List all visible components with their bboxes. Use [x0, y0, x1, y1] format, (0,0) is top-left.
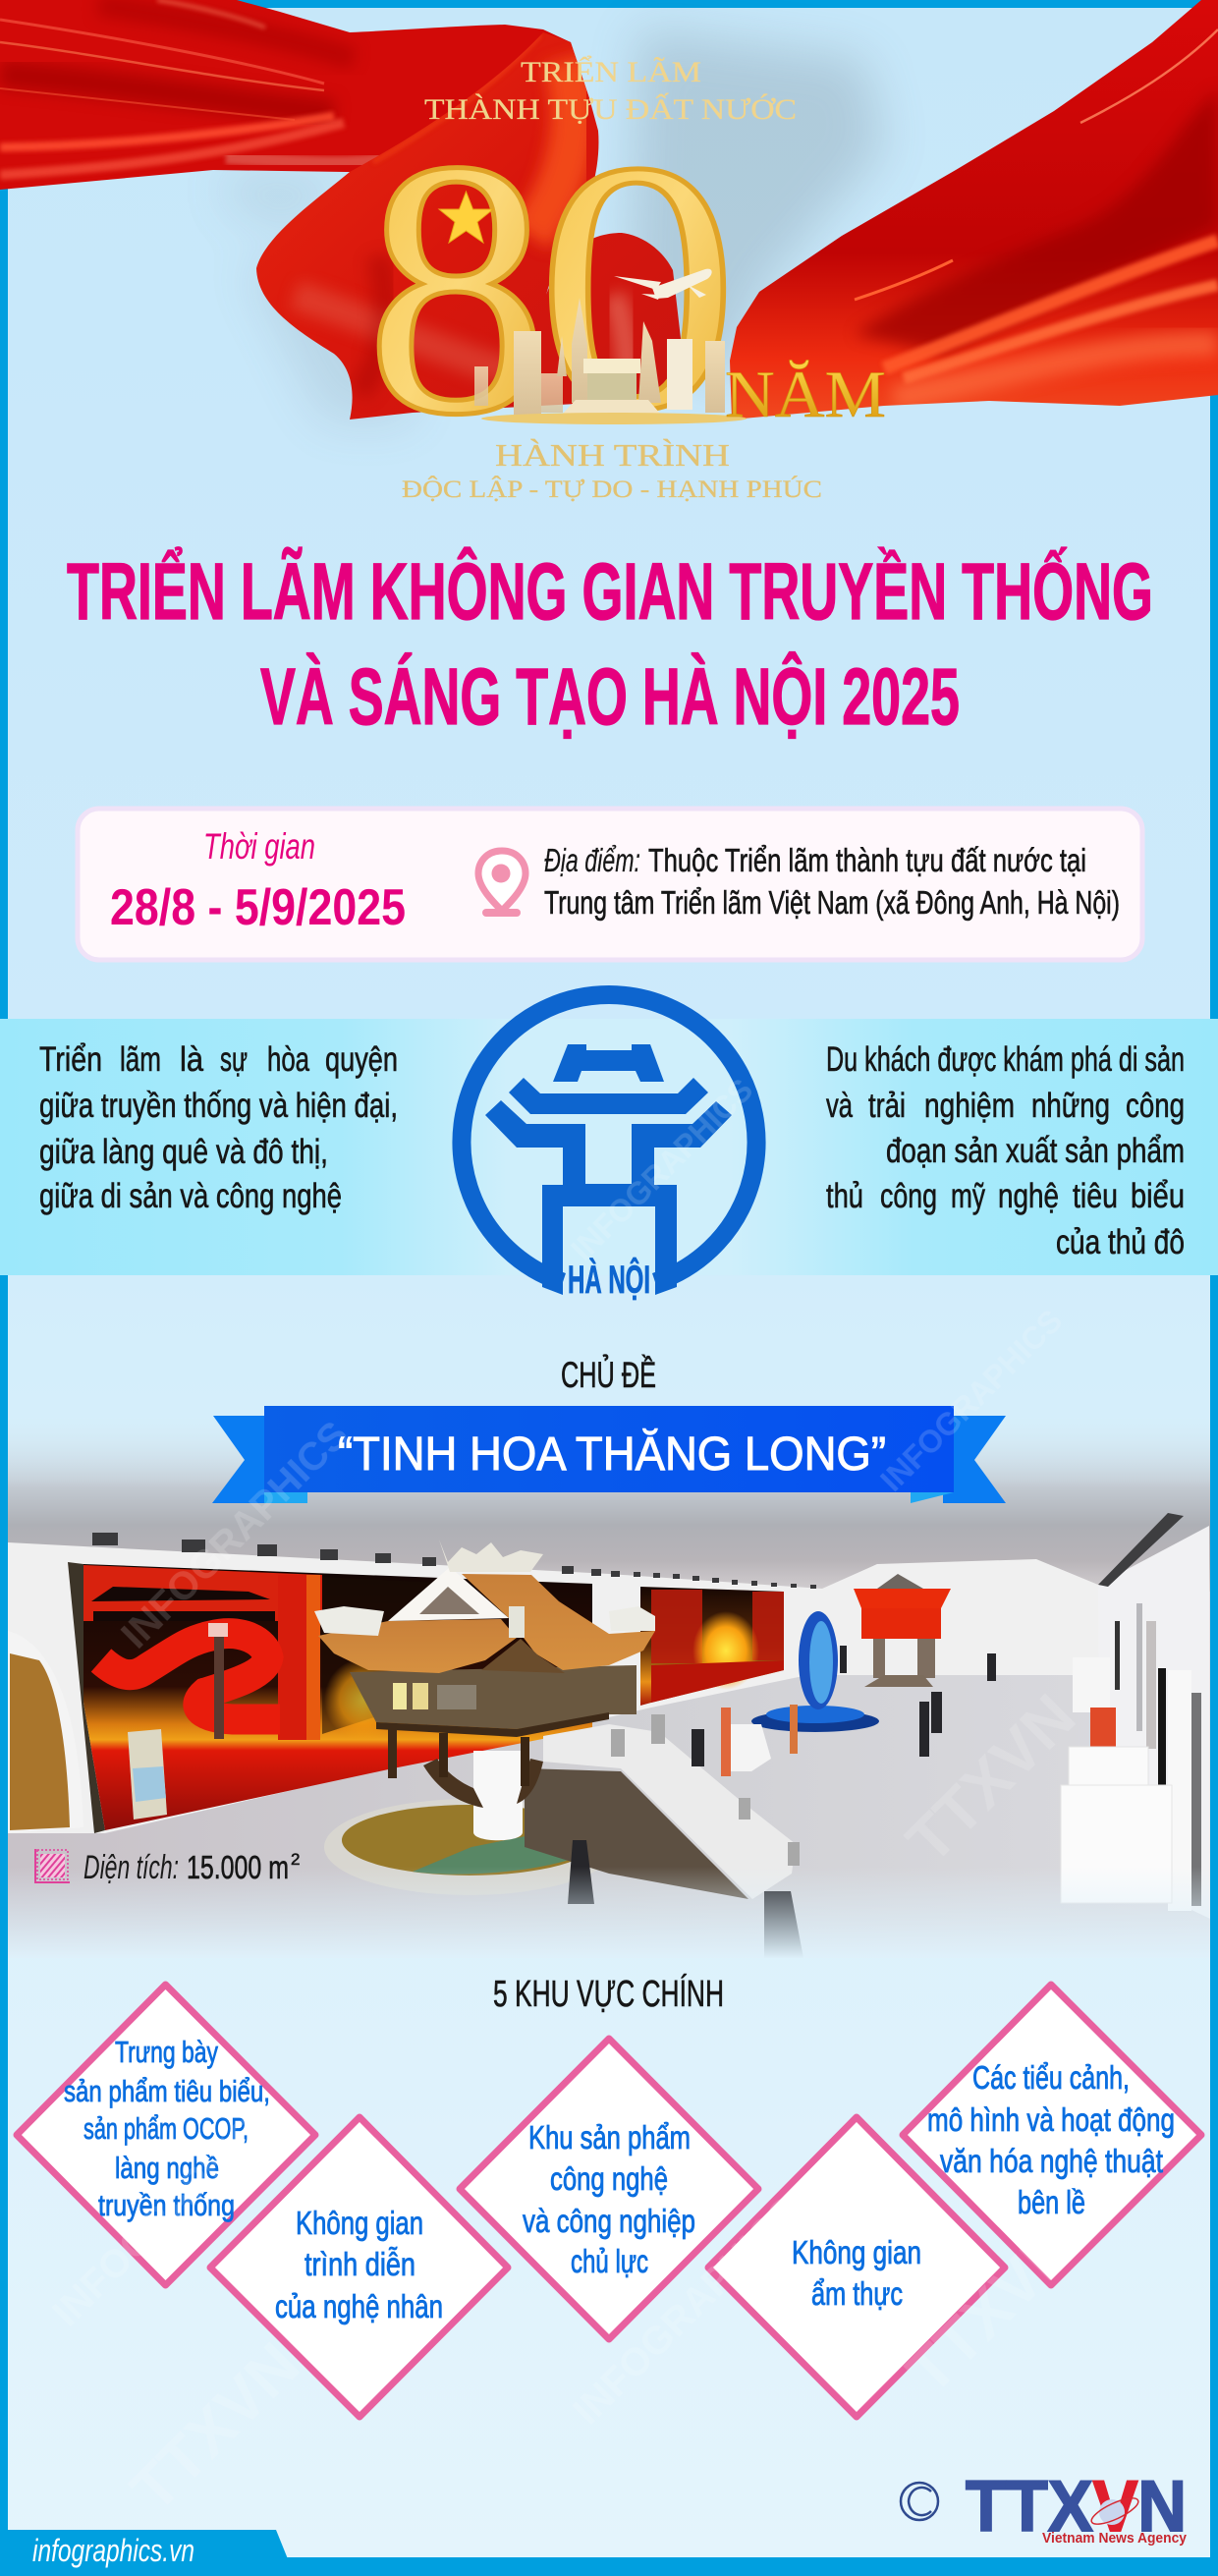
LED screen right: [640, 1587, 784, 1706]
logo: Hà Nội emblem: HÀ NỘI: [568, 1257, 650, 1302]
watermarks: [44, 1072, 1088, 2525]
diamond: area 1: làng nghề: [115, 2151, 219, 2185]
logo: TTXVN: TTXVN: [966, 2467, 1187, 2547]
watermarks: INFOGRAPHICS: [873, 1303, 1069, 1498]
text: right description: mỹ: [951, 1177, 985, 1215]
pagoda body: [350, 1665, 637, 1786]
wooden arch door: [10, 1653, 70, 1830]
ceiling: [8, 1446, 1210, 1592]
skyline and monument: [474, 298, 725, 415]
diamond: area 2: Không gian: [296, 2205, 423, 2241]
watermarks: INFOGRAPHICS: [565, 2189, 808, 2433]
text: left description: quyện: [325, 1040, 398, 1079]
ceiling strip: [1098, 1513, 1184, 1587]
right wall: [1098, 1526, 1210, 1919]
balusters: [611, 1714, 800, 1866]
header text: Triển lãm Thành tựu đất nước: TRIỂN LÃM: [521, 56, 701, 88]
text: right description: thủ: [826, 1177, 863, 1215]
panel: description band: [0, 1019, 1218, 1275]
diamond: area 3: công nghệ: [550, 2160, 668, 2197]
logo: 80 gold numerals with star: 8: [365, 86, 548, 490]
text: right description: của thủ đô: [1056, 1223, 1185, 1261]
diamond: area 2: trình diễn: [304, 2246, 415, 2282]
text: năm: NĂM: [725, 357, 886, 431]
back wall: [822, 1559, 1108, 1675]
plane: [614, 269, 712, 300]
watermarks: TTXVN: [117, 2329, 312, 2525]
text: time label: Thời gian: [203, 826, 315, 867]
standee: [128, 1729, 167, 1820]
poster flags: [721, 1708, 731, 1776]
text: left description: giữa làng quê và đô thị,: [39, 1133, 328, 1171]
LED screen left: [68, 1562, 592, 1833]
back pavilion: [854, 1574, 951, 1687]
diamond: area 4: ẩm thực: [811, 2275, 903, 2312]
text: hành trình tagline: ĐỘC LẬP - TỰ DO - HẠNH PHÚC: [402, 476, 822, 503]
banner: theme: [212, 1406, 1006, 1503]
text: right description: [826, 1040, 1185, 1261]
text: left description: lãm: [120, 1040, 161, 1079]
bottom fade: [8, 1867, 1210, 1959]
watermarks: INFOGRAPHICS: [113, 1413, 357, 1656]
watermarks: TTXVN: [893, 2212, 1088, 2407]
title: [67, 547, 1153, 742]
area label: [35, 1849, 300, 1886]
logo: TTXVN: Vietnam News Agency: [1042, 2530, 1188, 2547]
diamond: area 5: Các tiểu cảnh,: [972, 2059, 1130, 2096]
panel: time and place: [78, 809, 1142, 960]
header artwork: red silk ribbons: [0, 0, 1218, 432]
diamond: area 5: [903, 1985, 1201, 2285]
text: right description: trải: [868, 1087, 906, 1125]
text: left description: là: [180, 1040, 203, 1079]
text: right description: những: [1031, 1087, 1110, 1125]
heading: chủ đề: CHỦ ĐỀ: [561, 1354, 656, 1395]
icon: area: [35, 1849, 70, 1882]
diamond: area 1: sản phẩm tiêu biểu,: [64, 2074, 270, 2108]
diamond: area 1: truyền thống: [98, 2188, 235, 2222]
text: area: Diện tích:: [83, 1849, 179, 1886]
text: right description: và: [826, 1087, 853, 1125]
left wall: [8, 1542, 822, 1833]
logo: Hà Nội emblem: [462, 995, 756, 1302]
diamond: area 1: [17, 1985, 315, 2285]
floor: [8, 1592, 1210, 1960]
text: left description: Triển: [39, 1040, 102, 1079]
text: right description: công: [880, 1177, 937, 1215]
diamond: area 1: Trưng bày: [115, 2035, 218, 2069]
ribbon: centre drape: [256, 32, 681, 420]
text: site name: infographics.vn: [32, 2533, 194, 2568]
soft shadows behind ribbons: [226, 29, 884, 422]
spotlights: [92, 1533, 816, 1589]
diamond: area 4: [708, 2117, 1005, 2417]
watermarks: TTXVN: [893, 1681, 1088, 1876]
area label: 15.000 m: [187, 1849, 289, 1885]
diamond: area 2: của nghệ nhân: [275, 2288, 443, 2324]
people: [568, 1646, 996, 1958]
diamond: area 3: [460, 2039, 758, 2339]
logo: 80 gold numerals with star: [365, 86, 747, 490]
right side display blocks: [1061, 1657, 1172, 1903]
pagoda roof: [314, 1540, 655, 1673]
icon: location pin: [478, 851, 526, 917]
top fade: [8, 1419, 1210, 1487]
text: hành trình tagline: HÀNH TRÌNH: [495, 437, 730, 473]
star: [439, 192, 493, 243]
text: right description: biểu: [1131, 1177, 1185, 1215]
ribbon: right: [727, 0, 1218, 422]
pillar: [423, 1751, 543, 1840]
diamond: area 4: Không gian: [792, 2234, 921, 2270]
text: right description: công: [1126, 1087, 1185, 1125]
header text: Triển lãm Thành tựu đất nước: [424, 56, 797, 126]
text: hành trình tagline: [402, 437, 822, 503]
white podiums: [729, 1724, 771, 1771]
text: right description: nghiệm: [924, 1087, 1015, 1125]
copyright mark: [901, 2483, 938, 2520]
right wall panels: [1115, 1603, 1201, 1911]
diamond: area 5: văn hóa nghệ thuật: [940, 2143, 1163, 2179]
diamond: area 5: bên lề: [1018, 2184, 1085, 2220]
text: right description: nghệ: [998, 1177, 1059, 1215]
text: location: Thuộc Triển lãm thành tựu đất nước tại: [648, 842, 1086, 878]
watermarks: INFOGRAPHICS: [564, 1072, 759, 1267]
stairs: [543, 1724, 796, 1899]
footer tab: [0, 2530, 295, 2576]
text: left description: giữa truyền thống và hiện đại,: [39, 1087, 398, 1125]
diamond: area 3: Khu sản phẩm: [528, 2119, 691, 2156]
text: location: Địa điểm:: [544, 842, 640, 878]
stone wall under stairs: [525, 1768, 748, 1899]
watermarks: INFOGRAPHICS: [44, 2091, 288, 2334]
text: left description: giữa di sản và công nghệ: [39, 1177, 342, 1215]
diamond: area 2: [210, 2117, 508, 2417]
text: right description: tiêu: [1073, 1177, 1118, 1215]
text: left description: sự: [220, 1040, 248, 1079]
text: theme name: “TINH HOA THĂNG LONG”: [338, 1428, 886, 1481]
text: left description: [39, 1040, 398, 1215]
text: location: [544, 842, 1120, 921]
header text: Triển lãm Thành tựu đất nước: THÀNH TỰU ĐẤT NƯỚC: [424, 92, 797, 126]
ribbon: left band: [0, 0, 609, 196]
diamond: area 3: và công nghiệp: [523, 2203, 695, 2239]
heading: five main areas: 5 KHU VỰC CHÍNH: [493, 1973, 724, 2015]
pond: [324, 1800, 597, 1890]
diamond: area 3: chủ lực: [571, 2243, 648, 2279]
blue round sign: [751, 1611, 879, 1732]
logo: 80 gold numerals with star: 0: [536, 88, 739, 484]
text: dates: 28/8 - 5/9/2025: [110, 879, 406, 936]
text: left description: hòa: [267, 1040, 309, 1079]
area label: 2: [291, 1850, 300, 1869]
diamond: area 1: sản phẩm OCOP,: [83, 2111, 249, 2146]
photo: exhibition hall rendering: [8, 1419, 1210, 1960]
